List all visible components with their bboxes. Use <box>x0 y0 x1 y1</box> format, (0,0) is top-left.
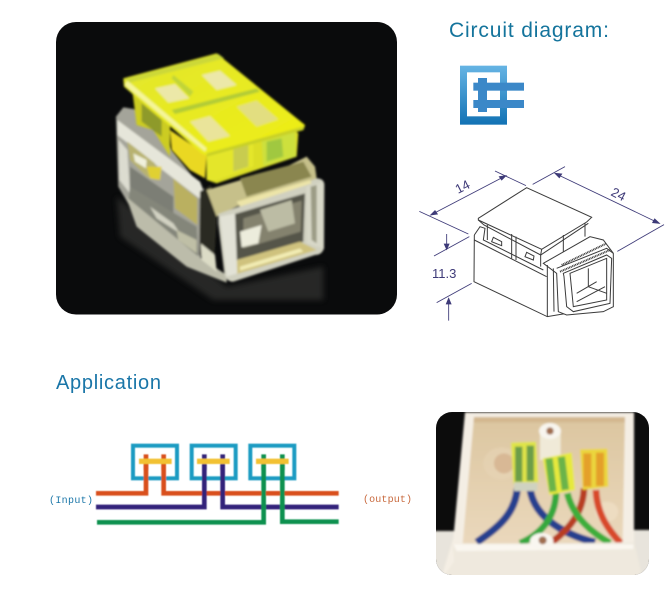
white side strips <box>436 528 649 574</box>
green wire <box>97 454 339 522</box>
knockouts <box>494 453 514 473</box>
connector 3 <box>580 449 608 490</box>
box interior <box>463 417 625 543</box>
dimension label: 11.3: 11.3 <box>432 266 456 281</box>
box front rim <box>478 540 622 546</box>
reflection under connector <box>117 197 323 300</box>
panel: junction box photo <box>430 412 657 582</box>
connector box 1 <box>133 446 177 478</box>
top screw post <box>539 423 561 460</box>
purple wire <box>96 454 339 507</box>
connector 1 <box>511 442 538 491</box>
label: input: (Input) <box>49 495 93 507</box>
connector 2 <box>543 453 575 495</box>
heading: Application: Application <box>56 372 161 394</box>
dimension label: 24: 24 <box>609 184 628 204</box>
blue wires <box>477 488 517 542</box>
dimension label: 14: 14 <box>453 177 472 197</box>
label: output: (output) <box>363 494 412 506</box>
bottom screw post <box>530 533 553 549</box>
wiring diagram <box>96 446 339 522</box>
dimension drawing <box>419 167 664 321</box>
box wall <box>440 412 643 582</box>
green wires <box>520 493 556 543</box>
panel: connector photo <box>56 22 397 314</box>
connector box 2 <box>192 446 236 478</box>
clear housing body <box>116 107 324 283</box>
icon: circuit symbol <box>460 66 524 125</box>
yellow contact bars <box>139 459 289 464</box>
connector: clear housing and yellow lever <box>116 53 324 300</box>
dimension lines <box>419 167 664 321</box>
connector box 3 <box>250 446 294 478</box>
heading: Circuit diagram: Circuit diagram: <box>449 19 609 42</box>
top plate <box>123 53 305 156</box>
yellow lever <box>123 53 305 183</box>
connector outline <box>474 188 613 317</box>
front rectangular frame <box>218 178 324 282</box>
red wires <box>553 488 584 542</box>
orange wire <box>96 454 339 493</box>
front collar top <box>207 157 317 217</box>
